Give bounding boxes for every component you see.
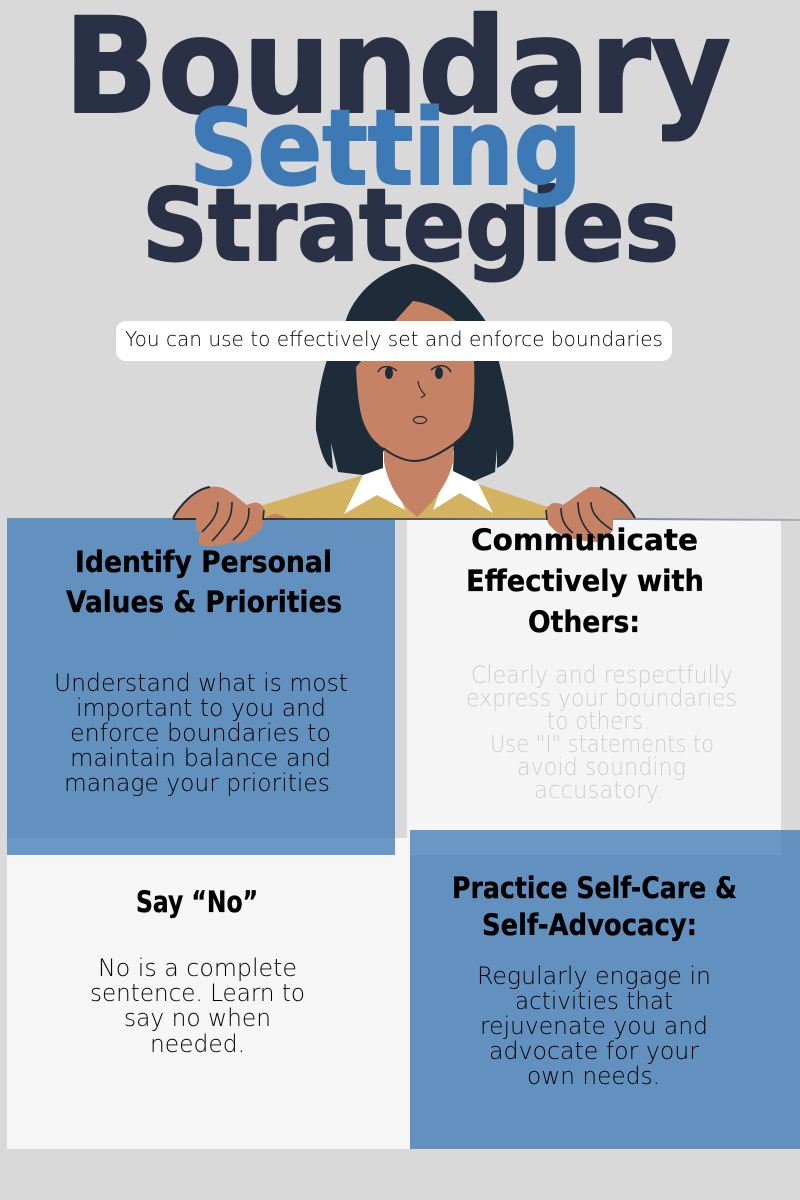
text: Communicate body: accusatory. bbox=[534, 776, 663, 804]
neck bbox=[384, 440, 454, 517]
text: Say No body: needed. bbox=[150, 1030, 245, 1058]
mouth bbox=[414, 416, 426, 424]
text: Practice body: activities that bbox=[515, 987, 673, 1015]
text: Practice body: rejuvenate you and bbox=[480, 1012, 708, 1040]
text: Say No body: No is a complete bbox=[98, 954, 297, 982]
subtitle pill: You can use to effectively set and enforce boundaries bbox=[125, 327, 663, 351]
text: Practice body: Regularly engage in bbox=[477, 962, 711, 990]
board top edge bbox=[173, 519, 800, 520]
title word: Strategies: Strategies bbox=[142, 167, 679, 284]
text: Say No body: say no when bbox=[124, 1004, 271, 1032]
hair bbox=[316, 264, 514, 482]
heading: Communicate Effectively with Others: Effectively with bbox=[466, 564, 704, 598]
right eye bbox=[431, 366, 451, 379]
heading: Identify Personal Values & Priorities: Values & Priorities bbox=[66, 585, 342, 619]
text: Communicate body: express your boundaries bbox=[466, 684, 737, 712]
text: Identify body: enforce boundaries to bbox=[70, 719, 331, 747]
subtitle pill bbox=[116, 321, 672, 361]
jaw line bbox=[383, 444, 454, 461]
text: Say No body: sentence. Learn to bbox=[90, 979, 305, 1007]
text: Communicate body bbox=[466, 661, 737, 804]
title bbox=[64, 0, 731, 284]
panel: Identify background bbox=[7, 518, 395, 855]
heading: Communicate Effectively with Others: Communicate bbox=[471, 523, 698, 557]
face bbox=[356, 301, 474, 460]
text: Communicate body: Clearly and respectfully bbox=[471, 661, 733, 689]
heading: Practice Self-Care & Self-Advocacy bbox=[452, 871, 737, 942]
text: Communicate body: Use "I" statements to bbox=[490, 730, 714, 758]
text: Communicate body: to others. bbox=[547, 707, 650, 735]
nose bbox=[418, 381, 425, 398]
heading: Identify Personal Values & Priorities bbox=[66, 545, 342, 619]
illustration: woman peeking over the board bbox=[260, 264, 548, 519]
left eye bbox=[378, 367, 397, 379]
text: Identify body: manage your priorities bbox=[64, 769, 330, 797]
left hand bbox=[173, 487, 264, 546]
text: Practice body: own needs. bbox=[527, 1062, 660, 1090]
heading: Practice Self-Care & Self-Advocacy: Practice Self-Care & bbox=[452, 871, 737, 905]
heading: Identify Personal Values & Priorities: Identify Personal bbox=[75, 545, 332, 579]
title word: Setting: Setting bbox=[189, 87, 582, 209]
heading: Say No: Say “No” bbox=[136, 885, 258, 919]
heading: Communicate Effectively with Others: Others: bbox=[528, 605, 640, 639]
panel: Communicate background bbox=[407, 520, 781, 855]
panel: Say No background bbox=[7, 838, 410, 1149]
right hand bbox=[546, 487, 635, 542]
jacket bbox=[260, 475, 548, 519]
heading: Practice Self-Care & Self-Advocacy: Self-Advocacy: bbox=[482, 908, 697, 942]
text: Say No body bbox=[90, 954, 305, 1058]
text: Identify body: maintain balance and bbox=[70, 744, 331, 772]
text: Identify body: Understand what is most bbox=[54, 669, 348, 697]
text: Practice body: advocate for your bbox=[489, 1037, 699, 1065]
panel: Practice background bbox=[410, 830, 800, 1149]
heading: Communicate Effectively with Others bbox=[466, 523, 704, 639]
collar bbox=[344, 450, 493, 514]
text: Practice body bbox=[477, 962, 711, 1090]
text: Communicate body: avoid sounding bbox=[517, 753, 686, 781]
knuckle bump bbox=[266, 514, 286, 518]
text: Identify body bbox=[54, 669, 348, 797]
text: Identify body: important to you and bbox=[76, 694, 326, 722]
